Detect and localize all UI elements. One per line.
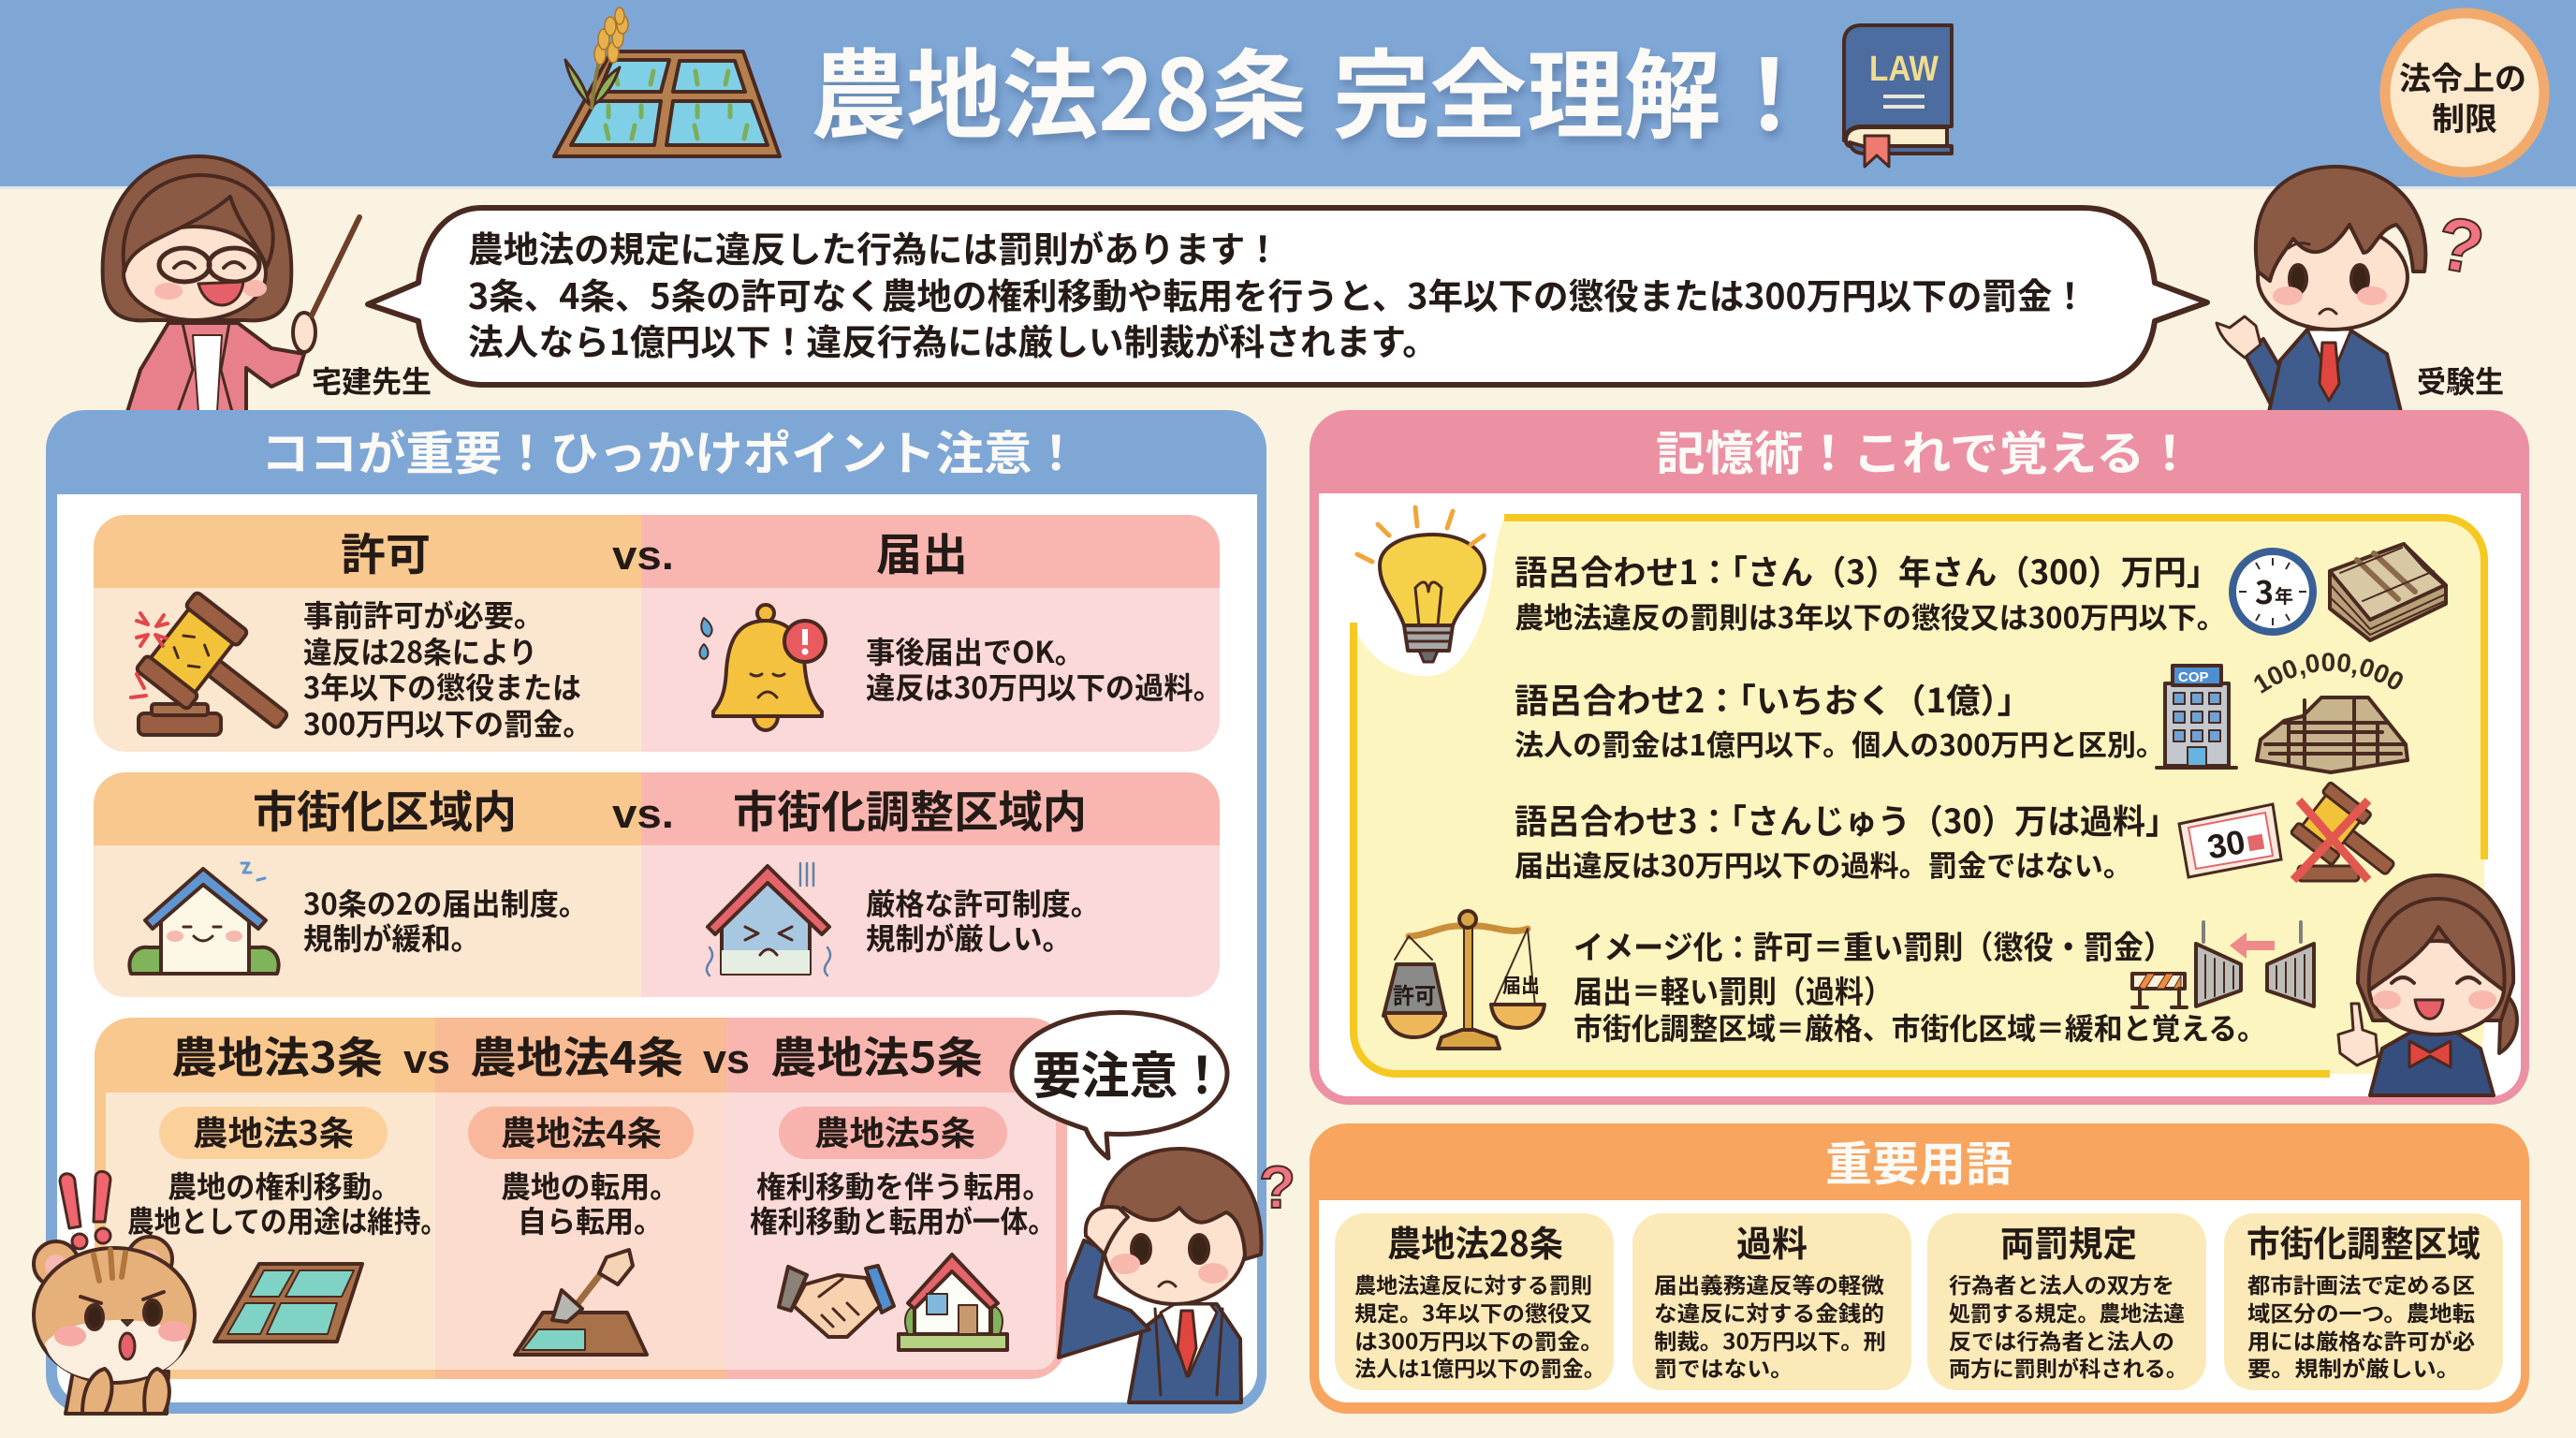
text: notification details: 違反は30万円以下の過料。 bbox=[866, 665, 1222, 708]
icon: money pile: 100,000,000 bbox=[2254, 653, 2403, 694]
term card: administrative fine: 制裁。30万円以下。刑 bbox=[1654, 1324, 1886, 1356]
term card: urbanization control area: 都市計画法で定める区 bbox=[2247, 1268, 2475, 1299]
column: article 4: 農地法4条 bbox=[501, 1107, 662, 1155]
mnemonic 3: 語呂合わせ3：「さんじゅう（30）万は過料」 bbox=[1515, 795, 2178, 844]
term card: dual liability: 両罰規定 bbox=[2000, 1215, 2137, 1267]
column: article 5: 権利移動と転用が一体。 bbox=[750, 1198, 1056, 1241]
label: teacher name: 宅建先生 bbox=[312, 359, 432, 402]
icon: handshake bbox=[779, 1266, 894, 1337]
icon: shovel on field bbox=[515, 1250, 647, 1355]
mnemonic 4: imagery bbox=[1383, 875, 2517, 1095]
icon: 3-year clock: 年 bbox=[2275, 581, 2293, 609]
icon: company building bbox=[2157, 666, 2236, 768]
mnemonic 1: 農地法違反の罰則は3年以下の懲役又は300万円以下。 bbox=[1515, 594, 2226, 637]
text: permit details: 3年以下の懲役または bbox=[303, 665, 581, 708]
icon: 300k voucher bbox=[2179, 804, 2281, 877]
icon: company building: COP bbox=[2178, 669, 2209, 685]
column: article 5: 農地法5条 bbox=[814, 1107, 975, 1155]
comparison: urbanization area vs control area bbox=[94, 772, 1220, 997]
term card: dual liability: 両方に罰則が科される。 bbox=[1949, 1351, 2188, 1383]
comparison heading: vs bbox=[403, 1036, 450, 1082]
bubble text bbox=[468, 221, 2087, 365]
comparison: urbanization area vs control area: 市街化調整区域内 bbox=[733, 776, 1087, 841]
icon: law book bbox=[1844, 25, 1952, 167]
term card: article 28 bbox=[1335, 1213, 1614, 1390]
mnemonic 2 bbox=[1515, 653, 2409, 774]
term card: article 28: 農地法違反に対する罰則 bbox=[1354, 1268, 1592, 1299]
comparison: permit vs notification: 届出 bbox=[876, 519, 968, 583]
term card: dual liability: 反では行為者と法人の bbox=[1949, 1324, 2174, 1356]
panel: tricky points bbox=[32, 410, 2529, 1416]
term card: article 28: 規定。3年以下の懲役又 bbox=[1354, 1296, 1592, 1328]
column: article 5: 権利移動を伴う転用。 bbox=[756, 1164, 1052, 1207]
badge: 法令上の制限 bbox=[2385, 13, 2544, 172]
text: urbanization area details bbox=[303, 881, 588, 959]
icon: question mark small: ? bbox=[1259, 1153, 1295, 1221]
character: worried student bbox=[1059, 1149, 1261, 1402]
comparison heading: 農地法5条 bbox=[770, 1024, 983, 1086]
column: article 3 bbox=[127, 1107, 447, 1342]
bubble text: 法人なら1億円以下！違反行為には厳しい制裁が科されます。 bbox=[468, 314, 1438, 365]
column: article 3: 農地の権利移動。 bbox=[168, 1164, 401, 1207]
term card: article 28: 法人は1億円以下の罰金。 bbox=[1354, 1351, 1605, 1383]
term card: urbanization control area bbox=[2224, 1213, 2503, 1390]
title: 完全理解！ bbox=[1333, 17, 1818, 158]
icon: balance scale bbox=[1383, 911, 1544, 1049]
icon: relaxed house bbox=[129, 863, 279, 974]
term card: dual liability bbox=[1927, 1213, 2206, 1390]
header band bbox=[0, 0, 2576, 189]
icon: crossed-out gavel bbox=[2291, 782, 2410, 895]
icon: strict house bbox=[707, 863, 830, 976]
text: notification details bbox=[866, 629, 1222, 708]
column: article 3: 農地としての用途は維持。 bbox=[127, 1198, 447, 1241]
character: hamster bbox=[34, 1237, 195, 1414]
mnemonic 4: imagery: イメージ化：許可＝重い罰則（懲役・罰金） bbox=[1573, 922, 2174, 968]
text: control area details: 規制が厳しい。 bbox=[866, 916, 1072, 959]
mnemonic 4: imagery: 市街化調整区域＝厳格、市街化区域＝緩和と覚える。 bbox=[1573, 1005, 2266, 1049]
mnemonic 2: 法人の罰金は1億円以下。個人の300万円と区別。 bbox=[1515, 722, 2165, 764]
text: notification details: 事後届出でOK。 bbox=[866, 629, 1084, 672]
panel heading: ココが重要！ひっかけポイント注意！ bbox=[261, 417, 1080, 484]
character: student girl bbox=[2338, 875, 2517, 1095]
mnemonic box bbox=[1354, 518, 2484, 1074]
icon: house on land bbox=[899, 1255, 1007, 1350]
comparison: urbanization area vs control area: 市街化区域内 bbox=[253, 776, 517, 841]
panel: key terms bbox=[1310, 1123, 2529, 1414]
column: article 4 bbox=[468, 1107, 694, 1355]
panel: mnemonics bbox=[1310, 410, 2529, 1414]
term card: administrative fine bbox=[1632, 1213, 1911, 1390]
callout: caution bubble: 要注意！ bbox=[1032, 1034, 1226, 1108]
speech bubble: teacher explanation bbox=[368, 208, 2207, 385]
term card: dual liability: 行為者と法人の双方を bbox=[1949, 1268, 2174, 1299]
mnemonic 1 bbox=[1515, 544, 2446, 640]
term card: administrative fine: な違反に対する金銭的 bbox=[1654, 1296, 1884, 1328]
bubble text: 農地法の規定に違反した行為には罰則があります！ bbox=[468, 221, 1281, 272]
comparison: articles 3, 4 and 5 bbox=[34, 1012, 1295, 1414]
term card: article 28: は300万円以下の罰金。 bbox=[1354, 1324, 1603, 1356]
character: teacher bbox=[103, 156, 359, 412]
column: article 4: 農地の転用。 bbox=[501, 1164, 680, 1207]
term card: dual liability: 処罰する規定。農地法違 bbox=[1949, 1296, 2185, 1328]
title: 農地法28条 bbox=[811, 17, 1307, 158]
column: article 4: 自ら転用。 bbox=[518, 1198, 663, 1241]
badge: 法令上の制限: 制限 bbox=[2432, 94, 2497, 139]
mnemonic 3: 届出違反は30万円以下の過料。罰金ではない。 bbox=[1515, 843, 2132, 885]
mnemonic 4: imagery: 届出＝軽い罰則（過料） bbox=[1573, 967, 1893, 1012]
comparison: permit vs notification: 許可 bbox=[341, 519, 431, 583]
text: control area details: 厳格な許可制度。 bbox=[866, 881, 1100, 924]
icon: farmland bbox=[214, 1264, 362, 1342]
icon: money pile bbox=[2254, 653, 2409, 774]
character: student top right bbox=[2217, 167, 2425, 412]
callout: caution bubble bbox=[1012, 1012, 1227, 1158]
icon: 3-year clock: 3 bbox=[2255, 567, 2274, 613]
icon: law book: LAW bbox=[1869, 50, 1939, 89]
text: urbanization area details: 規制が緩和。 bbox=[303, 916, 480, 959]
column: article 3: 農地法3条 bbox=[193, 1107, 354, 1155]
icon: balance scale: 許可 bbox=[1393, 977, 1436, 1010]
icon: rice field bbox=[554, 7, 780, 156]
icon: 3-year clock bbox=[2232, 551, 2313, 632]
text: control area details bbox=[866, 881, 1100, 959]
text: permit details: 事前許可が必要。 bbox=[303, 593, 544, 636]
label: student name: 受験生 bbox=[2417, 359, 2504, 402]
term card: administrative fine: 届出義務違反等の軽微 bbox=[1654, 1268, 1884, 1299]
term card: urbanization control area: 市街化調整区域 bbox=[2247, 1215, 2481, 1267]
mnemonic 1: 語呂合わせ1：「さん（3）年さん（300）万円」 bbox=[1515, 546, 2219, 594]
text: urbanization area details: 30条の2の届出制度。 bbox=[303, 881, 588, 924]
comparison heading: 農地法4条 bbox=[470, 1024, 683, 1086]
text: permit details: 300万円以下の罰金。 bbox=[303, 701, 593, 744]
column: article 5 bbox=[750, 1107, 1056, 1350]
term card: administrative fine: 罰ではない。 bbox=[1654, 1351, 1793, 1383]
bubble text: 3条、4条、5条の許可なく農地の権利移動や転用を行うと、3年以下の懲役または300万円以下の罰金！ bbox=[468, 268, 2087, 319]
term card: administrative fine: 過料 bbox=[1736, 1215, 1808, 1267]
icon: money stacks bbox=[2330, 544, 2446, 640]
badge: 法令上の制限: 法令上の bbox=[2399, 53, 2526, 99]
icon: worried bell bbox=[700, 605, 826, 730]
term card: urbanization control area: 域区分の一つ。農地転 bbox=[2247, 1296, 2475, 1328]
mnemonic 3 bbox=[1515, 782, 2410, 895]
comparison: urbanization area vs control area: vs. bbox=[612, 791, 674, 837]
term card: urbanization control area: 要。規制が厳しい。 bbox=[2247, 1351, 2460, 1383]
term card: article 28: 農地法28条 bbox=[1387, 1215, 1563, 1267]
icon: exclamation marks bbox=[60, 1171, 110, 1249]
comparison: permit vs notification bbox=[94, 515, 1222, 760]
comparison heading bbox=[171, 1024, 983, 1086]
term card: urbanization control area: 用には厳格な許可が必 bbox=[2247, 1324, 2475, 1356]
text: permit details: 違反は28条により bbox=[303, 629, 537, 672]
icon: question mark: ? bbox=[2431, 200, 2490, 290]
icon: light bulb bbox=[1357, 507, 1485, 662]
panel heading: 重要用語 bbox=[1825, 1127, 2012, 1195]
icon: angry gavel bbox=[131, 592, 314, 760]
comparison: permit vs notification: vs. bbox=[612, 533, 674, 579]
icon: balance scale: 届出 bbox=[1502, 971, 1540, 999]
mnemonic 2: 語呂合わせ2：「いちおく（1億）」 bbox=[1515, 674, 2031, 723]
icon: gate and barrier bbox=[2132, 922, 2314, 1007]
title bbox=[811, 17, 1818, 158]
comparison heading: 農地法3条 bbox=[171, 1024, 383, 1086]
comparison heading: vs bbox=[703, 1036, 750, 1082]
panel heading: 記憶術！これで覚える！ bbox=[1656, 417, 2194, 484]
icon: 300k voucher: 30 bbox=[2204, 822, 2248, 866]
text: permit details bbox=[303, 593, 593, 744]
